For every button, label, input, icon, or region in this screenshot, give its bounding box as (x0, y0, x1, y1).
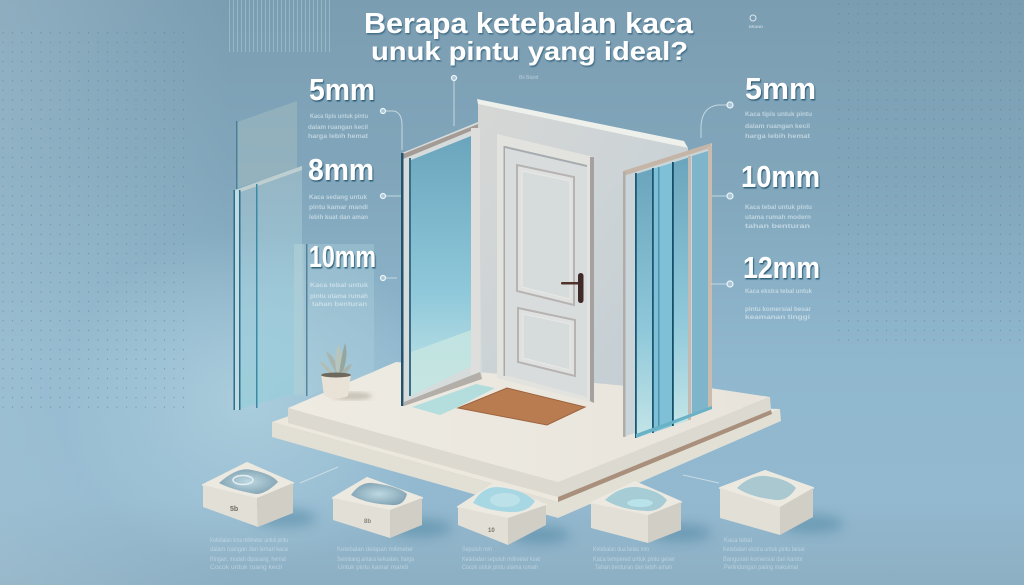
door (497, 134, 594, 403)
connector tick: box 1 (300, 467, 338, 483)
sample box 1: 5b (230, 506, 238, 513)
right label: 5mm: dalam ruangan kecil (745, 123, 810, 130)
sample box 1 caption: Ringan, mudah dipasang, hemat (210, 556, 286, 563)
left label: 8mm: pintu kamar mandi (309, 204, 368, 211)
left label: 10mm: tahan benturan (312, 301, 367, 308)
title: unuk pintu yang ideal? (371, 36, 688, 66)
small logo mark: BRAND (749, 24, 763, 29)
sample box 3 caption: Cocok untuk pintu utama rumah (462, 564, 538, 571)
sample box 4 caption: Kaca tempered untuk pintu geser (593, 556, 676, 563)
sample box 3: 10 (488, 528, 495, 534)
leader: top (452, 76, 456, 126)
sample box 1 caption: Cocok untuk ruang kecil (210, 564, 283, 571)
right label: 5mm (745, 71, 816, 140)
glass panel: 10mm (294, 244, 374, 396)
wall with cornice (477, 99, 690, 392)
sample box 1 (203, 463, 317, 527)
doormat (458, 388, 585, 425)
door handle (561, 273, 584, 303)
leader: right 12mm (711, 281, 733, 287)
left label: 8mm: 8mm (308, 152, 374, 187)
sample box 3 caption (462, 546, 540, 571)
left label: 10mm (309, 239, 376, 308)
right label: 10mm: 10mm (741, 159, 820, 194)
sample box 4 caption (593, 546, 676, 571)
lower panel (518, 308, 575, 376)
sample box 4 caption: Ketebalan dua belas mm (593, 546, 649, 553)
plant in pot (320, 343, 372, 400)
glass panel: 5mm (237, 101, 297, 188)
small logo mark (749, 15, 763, 29)
leader: left 5mm (380, 108, 402, 150)
right label: 12mm: 12mm (743, 250, 820, 285)
right label: 10mm: tahan benturan (745, 223, 810, 230)
sample box 5 caption: Ketebalan ekstra untuk pintu besar (723, 546, 806, 553)
sample box 2 caption (337, 546, 414, 571)
callout leader lines (380, 76, 733, 287)
stepped floor platform (272, 362, 781, 518)
sample box 5 caption: Bangunan komersial dan kantor (723, 556, 804, 563)
sample box 5 caption (723, 537, 806, 571)
left label: 8mm (308, 152, 374, 221)
small caption under title: Bii Bàsid (519, 75, 539, 81)
sample box 4 (591, 482, 712, 543)
right label: 12mm: Kaca ekstra tebal untuk (745, 288, 812, 295)
right label: 12mm: pintu komersial besar (745, 306, 811, 313)
sample box 2 caption: Untuk pintu kamar mandi (338, 564, 408, 571)
leader: right 5mm (701, 102, 733, 138)
left label: 10mm: pintu utama rumah (310, 293, 368, 300)
connector tick: box 5 (683, 475, 719, 483)
door frame (497, 134, 594, 403)
sample box 3 caption: Sepuluh mm (462, 546, 492, 553)
sample box 1 caption: Ketebalan lima milimeter untuk pintu (210, 537, 288, 544)
sample box 2 (333, 478, 452, 538)
sample box 2 caption: Seimbang antara kekuatan, harga (337, 556, 414, 563)
left label: 5mm: harga lebih hemat (308, 133, 369, 140)
right label: 5mm: Kaca tipis untuk pintu (745, 111, 812, 118)
sample box 3 caption: Ketebalan sepuluh milimeter kuat (462, 556, 540, 563)
right label: 5mm: 5mm (745, 71, 816, 106)
open glass door (401, 122, 482, 406)
left label: 5mm (308, 72, 375, 140)
left label: 5mm: dalam ruangan kecil (308, 124, 368, 131)
right glass stack (623, 143, 712, 438)
sample box 2: 8b (364, 519, 371, 525)
sample box 5 (720, 471, 844, 535)
upper panel (517, 165, 574, 305)
sample box 5 caption: Kaca tebal (724, 537, 753, 544)
left label: 5mm: 5mm (309, 72, 375, 107)
right label: 10mm: utama rumah modern (745, 214, 811, 221)
title: Berapa ketebalan kaca (364, 8, 694, 40)
leader: right 10mm (712, 193, 733, 199)
title (364, 8, 694, 66)
right label: 10mm: Kaca tebal untuk pintu (745, 204, 812, 211)
leader: left 8mm (380, 194, 401, 198)
right label: 5mm: harga lebih hemat (745, 133, 811, 140)
sample box 5 caption: Perlindungan paling maksimal (724, 564, 798, 571)
left label: 5mm: Kaca tipis untuk pintu (310, 113, 368, 120)
door leaf (505, 146, 587, 397)
left label: 10mm: 10mm (309, 239, 376, 274)
leader: left 10mm (380, 276, 397, 280)
right label: 12mm: keamanan tinggi (745, 314, 810, 321)
glass panel: 8mm (235, 166, 302, 410)
sample box 4 caption: Tahan benturan dan lebih aman (595, 564, 672, 571)
sample box 1 caption (210, 537, 288, 571)
right label: 10mm (741, 159, 820, 230)
left label: 10mm: Kaca tebal untuk (310, 282, 368, 289)
left label: 8mm: Kaca sedang untuk (309, 194, 367, 201)
sample box 1 caption: dalam ruangan dan lemari kaca (210, 546, 288, 553)
right label: 12mm (743, 250, 820, 321)
left label: 8mm: lebih kuat dan aman (309, 214, 368, 221)
sample box 3 (458, 483, 570, 545)
left glass panels (234, 101, 374, 410)
floor reflection under glass door (412, 384, 495, 415)
sample box 2 caption: Ketebalan delapan milimeter (337, 546, 414, 553)
